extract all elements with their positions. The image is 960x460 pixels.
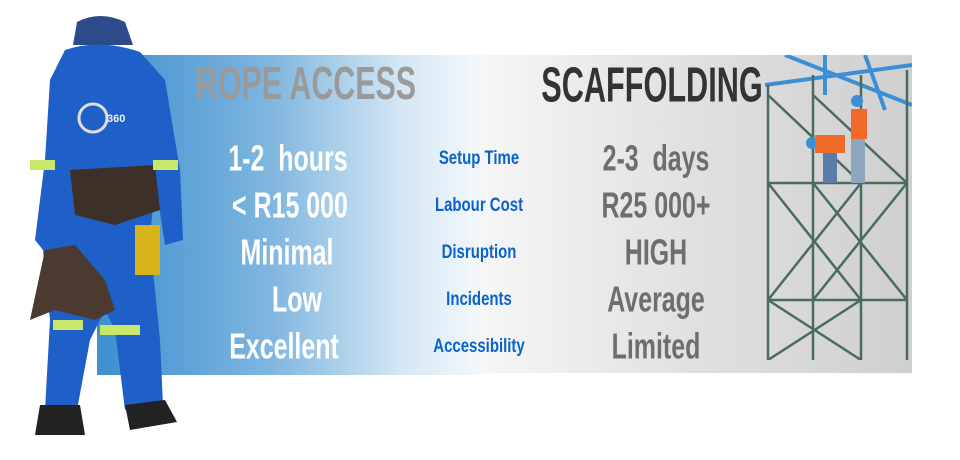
criteria labels: Accessibility	[433, 335, 525, 356]
rope access values: < R15 000	[232, 185, 348, 225]
rope access values	[228, 138, 348, 366]
criteria labels: Incidents	[446, 288, 512, 309]
rope access values: 1-2 hours	[228, 138, 348, 178]
rope access worker figure: 360	[107, 113, 125, 125]
workers	[806, 95, 867, 183]
scaffolding values: HIGH	[625, 232, 687, 272]
scaffolding values	[602, 138, 710, 366]
criteria labels: Labour Cost	[435, 194, 523, 215]
scaffolding values: R25 000+	[602, 185, 710, 225]
title: scaffolding: SCAFFOLDING	[541, 57, 763, 112]
scaffolding values: Average	[607, 279, 705, 319]
criteria labels	[433, 147, 525, 356]
panel: rope access background	[97, 55, 482, 375]
panel: scaffolding background	[482, 55, 912, 373]
criteria labels: Setup Time	[439, 147, 519, 168]
rope access values: Excellent	[229, 326, 339, 366]
rope access values: Minimal	[241, 232, 333, 272]
title: rope access: ROPE ACCESS	[196, 59, 416, 109]
scaffolding values: 2-3 days	[603, 138, 709, 178]
rope access worker figure	[30, 16, 183, 435]
rope access values: Low	[272, 279, 322, 319]
scaffolding values: Limited	[612, 326, 700, 366]
criteria labels: Disruption	[442, 241, 516, 262]
scaffolding photo	[765, 55, 912, 360]
